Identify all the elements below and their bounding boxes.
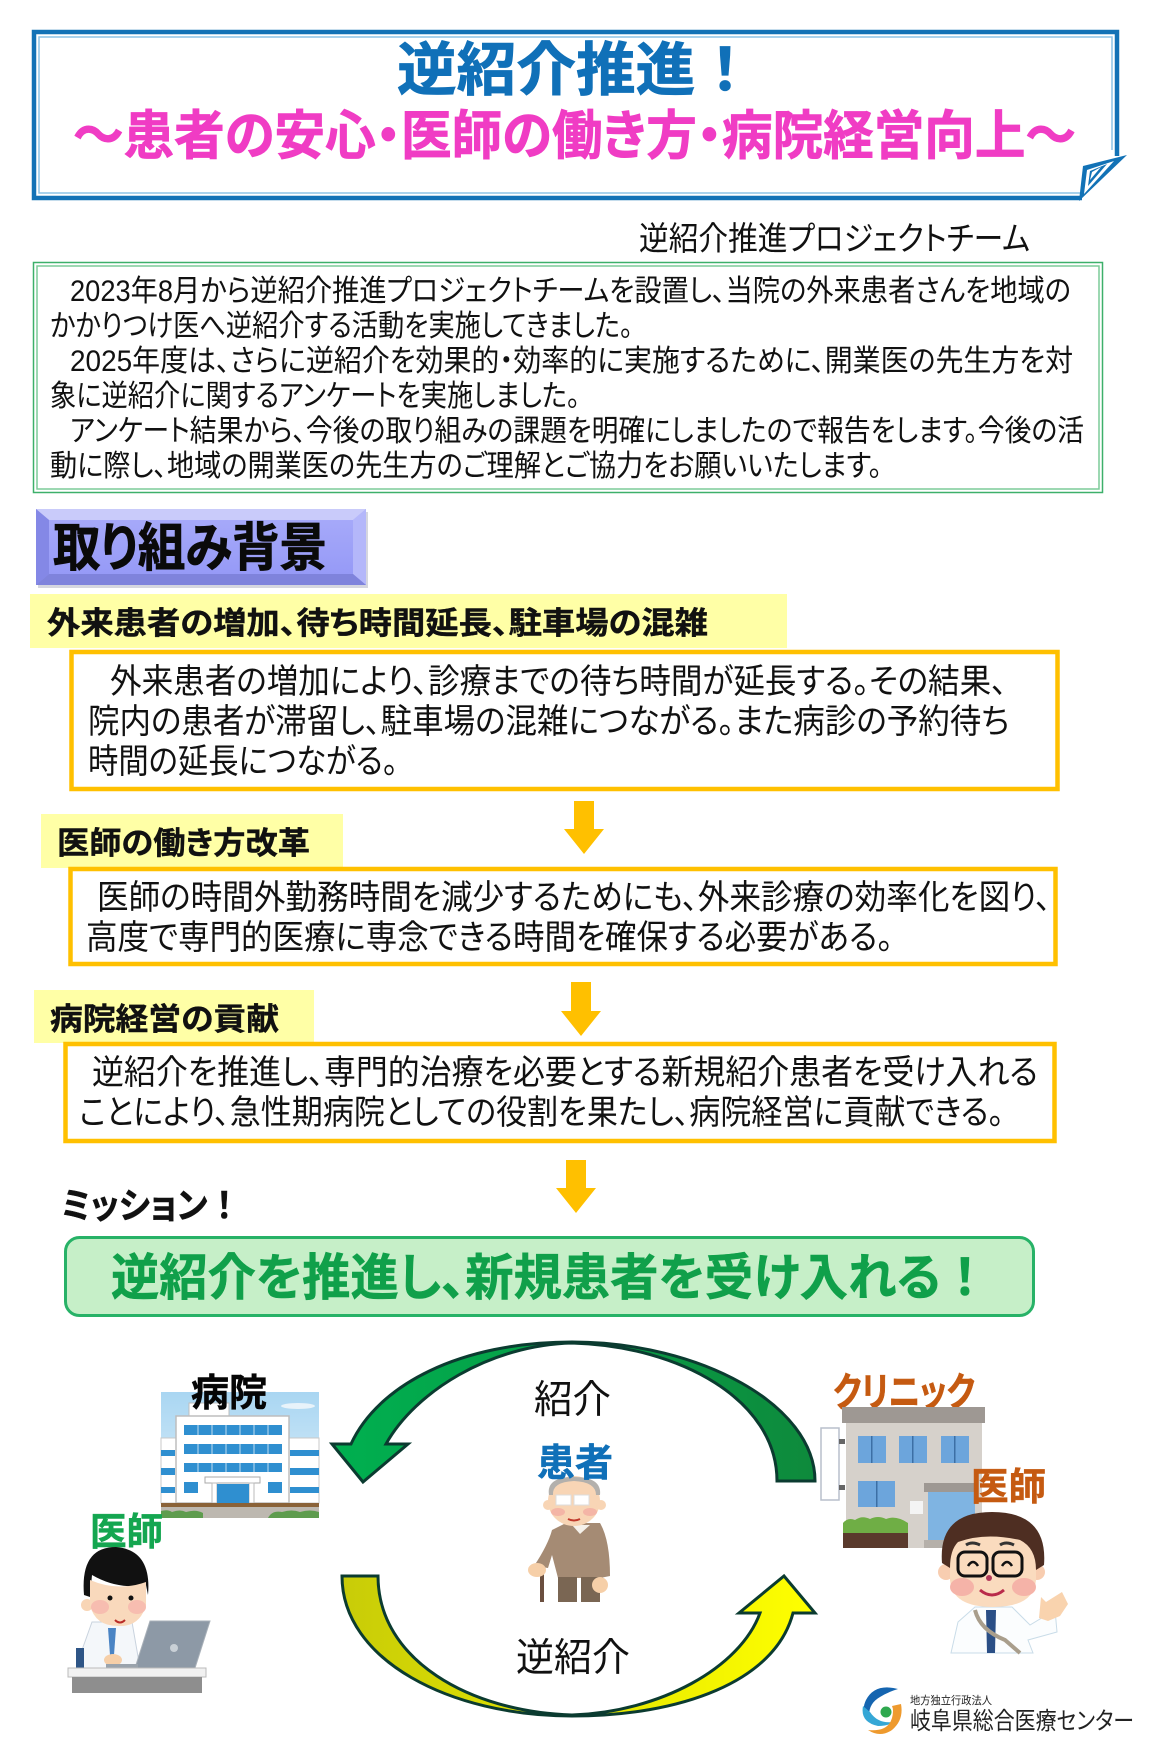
point 3 box: 逆紹介を推進し、専門的治療を必要とする新規紹介患者を受け入れる [92,1054,1038,1092]
point 1 heading [30,594,787,648]
point 2 box [70,869,1056,964]
arrow down 3 [556,1160,596,1213]
icon: smiling doctor with glasses [938,1512,1068,1653]
point 1 box: 院内の患者が滞留し、駐車場の混雑につながる。また病診の予約待ち [88,703,1009,741]
intro panel [34,262,1102,492]
label: clinic doctor: 医師 [971,1467,1046,1509]
point 3: hospital management [34,990,1054,1141]
icon: hospital [161,1392,319,1518]
point 3 heading: 病院経営の貢献 [50,1002,279,1037]
section heading: background [36,509,368,588]
icon: doctor at laptop [68,1547,210,1693]
intro text: 象に逆紹介に関するアンケートを実施しました。 [50,380,580,413]
title banner [34,32,1127,201]
point 2 box: 医師の時間外勤務時間を減少するためにも、外来診療の効率化を図り、 [97,879,1051,917]
mission label: ミッション！ [61,1185,241,1226]
mission pill [66,1238,1034,1316]
logo mark [863,1687,902,1734]
label: reverse referral: 逆紹介 [516,1637,630,1680]
intro text: かかりつけ医へ逆紹介する活動を実施してきました。 [50,310,633,343]
label: referral: 紹介 [534,1379,611,1422]
point 3 box: ことにより、急性期病院としての役割を果たし、病院経営に貢献できる。 [79,1094,1004,1132]
referral arrow (green) [332,1342,815,1482]
point 2 box: 高度で専門的医療に専念できる時間を確保する必要がある。 [86,919,893,957]
label: hospital doctor: 医師 [90,1512,163,1554]
point 1 heading: 外来患者の増加、待ち時間延長、駐車場の混雑 [47,606,708,641]
section heading: background: 取り組み背景 [53,520,327,578]
point 2: work style reform [41,814,1056,964]
icon: patient [528,1476,610,1602]
arrow down 2 [561,982,601,1036]
label: clinic: クリニック [833,1371,975,1415]
intro text: 動に際し、地域の開業医の先生方のご理解とご協力をお願いいたします。 [50,450,882,483]
arrow down 1 [564,801,604,854]
logo: Gifu Prefectural General Medical Center [863,1687,1134,1735]
intro text: 2023年8月から逆紹介推進プロジェクトチームを設置し、当院の外来患者さんを地域の [70,275,1071,308]
intro text: 2025年度は、さらに逆紹介を効果的・効率的に実施するために、開業医の先生方を対 [70,345,1073,378]
label: patient: 患者 [537,1443,613,1485]
point 1 box [72,652,1058,789]
point 1 box: 時間の延長につながる。 [88,743,398,781]
point 1: outpatients [30,594,1058,789]
title line 1: 逆紹介推進！ [397,38,755,103]
reverse referral arrow (yellow) [342,1576,815,1716]
intro text [50,275,1084,483]
logo small text: 地方独立行政法人 [910,1693,992,1707]
point 3 heading [34,990,314,1043]
point 3 box [66,1044,1054,1141]
author: project team: 逆紹介推進プロジェクトチーム [639,220,1030,257]
point 2 heading [41,814,343,868]
label: hospital: 病院 [191,1373,267,1415]
mission pill: 逆紹介を推進し、新規患者を受け入れる！ [111,1250,989,1306]
point 1 box: 外来患者の増加により、診療までの待ち時間が延長する。その結果、 [110,663,1007,701]
point 2 heading: 医師の働き方改革 [57,826,310,861]
icon: clinic building [821,1407,985,1548]
title line 2: 〜患者の安心・医師の働き方・病院経営向上〜 [73,107,1076,166]
